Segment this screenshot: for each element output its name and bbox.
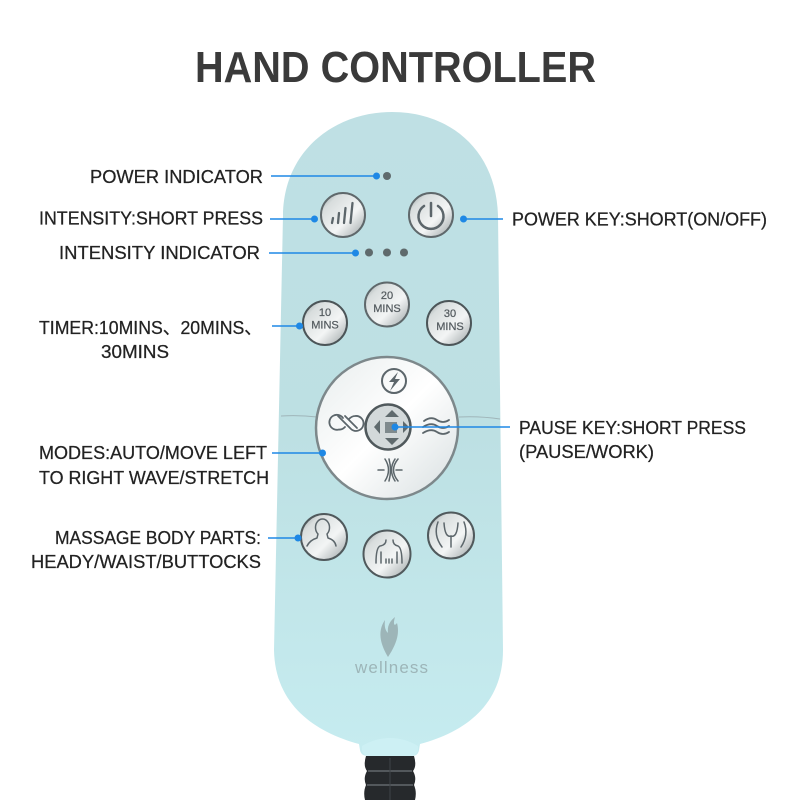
callout: intensity short press: INTENSITY:SHORT PRESS xyxy=(39,208,263,228)
button: 10 mins: MINS xyxy=(311,320,339,332)
button: 20 mins: 20 xyxy=(381,290,393,302)
button: power xyxy=(409,193,453,237)
button: intensity xyxy=(321,193,365,237)
center direction key xyxy=(366,404,410,450)
callout: timer: TIMER:10MINS、20MINS、 xyxy=(39,317,262,338)
intensity indicator lights xyxy=(365,248,408,256)
logo: wellness: wellness xyxy=(354,658,428,677)
callout: power key: POWER KEY:SHORT(ON/OFF) xyxy=(512,208,767,230)
callout: intensity indicator xyxy=(59,242,359,263)
callout: intensity indicator: INTENSITY INDICATOR xyxy=(59,242,260,263)
icon: infinity wave xyxy=(329,415,364,431)
callout: pause key: (PAUSE/WORK) xyxy=(519,441,654,462)
button: waist xyxy=(364,530,410,578)
button: 30 mins: MINS xyxy=(436,321,464,333)
icon: auto bolt xyxy=(382,369,406,393)
callout: pause key xyxy=(392,417,746,462)
button: 20 mins xyxy=(365,282,409,326)
button: buttocks xyxy=(428,512,474,558)
button: 10 mins: 10 xyxy=(319,307,331,319)
button: 20 mins: MINS xyxy=(373,303,401,315)
callout: power indicator: POWER INDICATOR xyxy=(90,166,263,187)
cable xyxy=(364,756,416,800)
callout: modes: MODES:AUTO/MOVE LEFT xyxy=(39,442,267,463)
mode dial xyxy=(316,357,458,499)
title: HAND CONTROLLER xyxy=(195,43,596,92)
callout: timer: 30MINS xyxy=(101,341,169,362)
callout: power indicator xyxy=(90,166,380,187)
callout: pause key: PAUSE KEY:SHORT PRESS xyxy=(519,417,746,438)
logo: flame xyxy=(380,617,398,657)
callout: modes xyxy=(39,442,326,488)
callout: modes: TO RIGHT WAVE/STRETCH xyxy=(39,467,269,488)
button: 30 mins: 30 xyxy=(444,308,456,320)
callout: massage body parts: HEADY/WAIST/BUTTOCKS xyxy=(31,551,261,572)
callout: massage body parts xyxy=(31,527,302,572)
body seam xyxy=(281,416,500,419)
callout: massage body parts: MASSAGE BODY PARTS: xyxy=(55,527,261,548)
icon: waves xyxy=(423,418,449,434)
button: head xyxy=(301,514,347,560)
power indicator light xyxy=(383,172,391,180)
button: 10 mins xyxy=(303,301,347,345)
controller neck highlight xyxy=(362,738,418,756)
callout: timer xyxy=(39,317,303,362)
icon: stretch xyxy=(378,459,402,481)
button: 30 mins xyxy=(427,301,471,345)
controller body xyxy=(274,112,503,756)
